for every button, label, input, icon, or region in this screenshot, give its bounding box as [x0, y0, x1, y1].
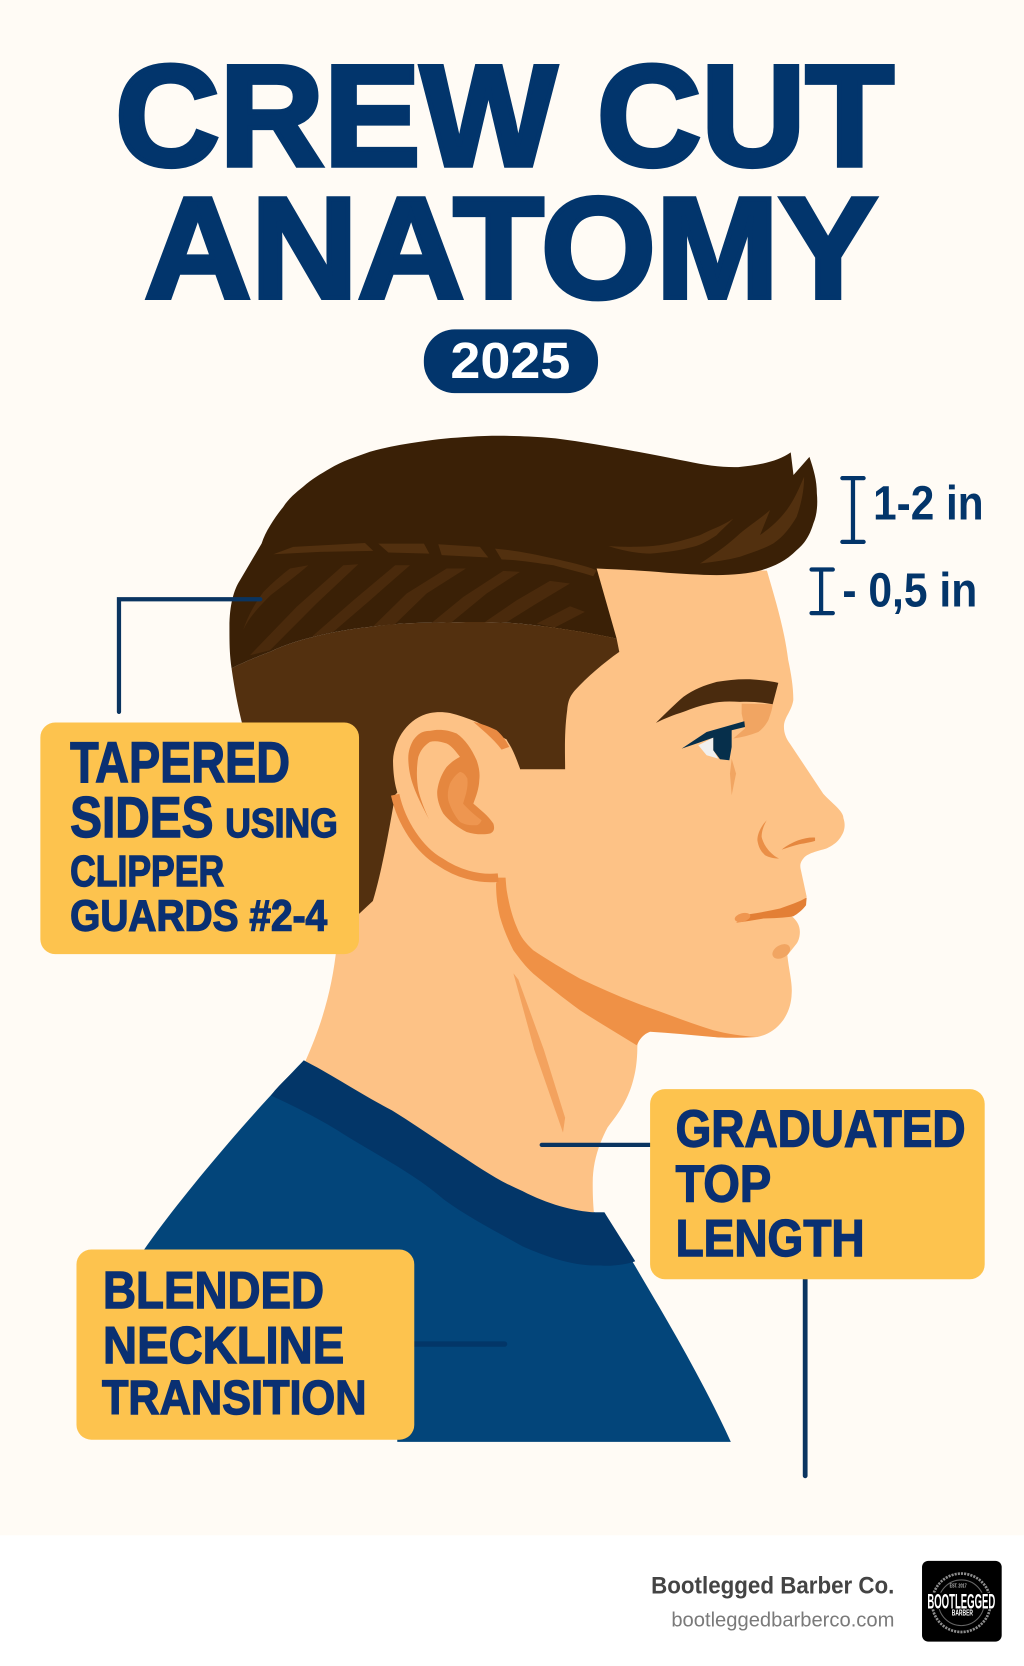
ear	[393, 712, 526, 878]
callout: graduated top length: TOP	[676, 1156, 771, 1214]
year badge: 2025	[450, 332, 570, 389]
title: CREW CUT	[115, 36, 894, 196]
callout: blended neckline transition: TRANSITION	[102, 1372, 366, 1425]
shirt	[127, 1060, 731, 1442]
callout: graduated top length	[650, 1089, 985, 1279]
leader line: tapered sides	[119, 599, 260, 712]
callout: tapered sides: TAPERED	[70, 731, 290, 795]
footer website: bootleggedbarberco.com	[671, 1609, 894, 1632]
shirt collar	[271, 1060, 635, 1266]
measurement: 1-2 in	[842, 478, 984, 542]
callout: graduated top length: LENGTH	[676, 1210, 865, 1268]
nose and mouth	[734, 820, 815, 962]
title: ANATOMY	[144, 169, 877, 329]
callout: graduated top length: GRADUATED	[676, 1100, 966, 1158]
title	[115, 36, 894, 329]
neck line	[513, 973, 565, 1133]
ear lobe line	[395, 795, 498, 878]
side hair	[232, 622, 619, 915]
jaw shadow	[496, 862, 757, 1045]
year badge	[424, 329, 598, 393]
callout: blended neckline transition	[76, 1250, 414, 1440]
top hair	[229, 436, 817, 668]
measurement: 0,5 in: - 0,5 in	[842, 565, 977, 618]
logo	[922, 1561, 1002, 1642]
callout: tapered sides: GUARDS #2-4	[70, 893, 327, 941]
eye and eyebrow	[656, 679, 778, 795]
ear inner	[448, 772, 482, 825]
leader line: graduated top	[542, 1143, 650, 1147]
ear helix and concha	[408, 730, 494, 834]
leader line: blended neckline	[414, 1342, 505, 1347]
logo: BARBER	[952, 1608, 973, 1618]
callout: blended neckline transition: BLENDED	[103, 1262, 324, 1320]
footer brand name: Bootlegged Barber Co.	[651, 1573, 894, 1600]
callout: tapered sides: USING	[225, 800, 338, 846]
callout: tapered sides	[40, 722, 359, 954]
logo: EST. 2017	[950, 1583, 967, 1589]
hair highlights	[273, 477, 804, 576]
measurement: 1-2 in: 1-2 in	[873, 478, 984, 531]
hair stripes	[243, 564, 585, 655]
ear top wedge	[473, 722, 509, 750]
illustration: man in profile	[127, 436, 845, 1442]
callout: tapered sides: SIDES	[70, 786, 214, 850]
leader line: graduated top lower	[803, 1279, 807, 1476]
callout: blended neckline transition: NECKLINE	[103, 1317, 344, 1375]
head and neck skin	[304, 568, 845, 1222]
callout: tapered sides: CLIPPER	[70, 848, 224, 896]
